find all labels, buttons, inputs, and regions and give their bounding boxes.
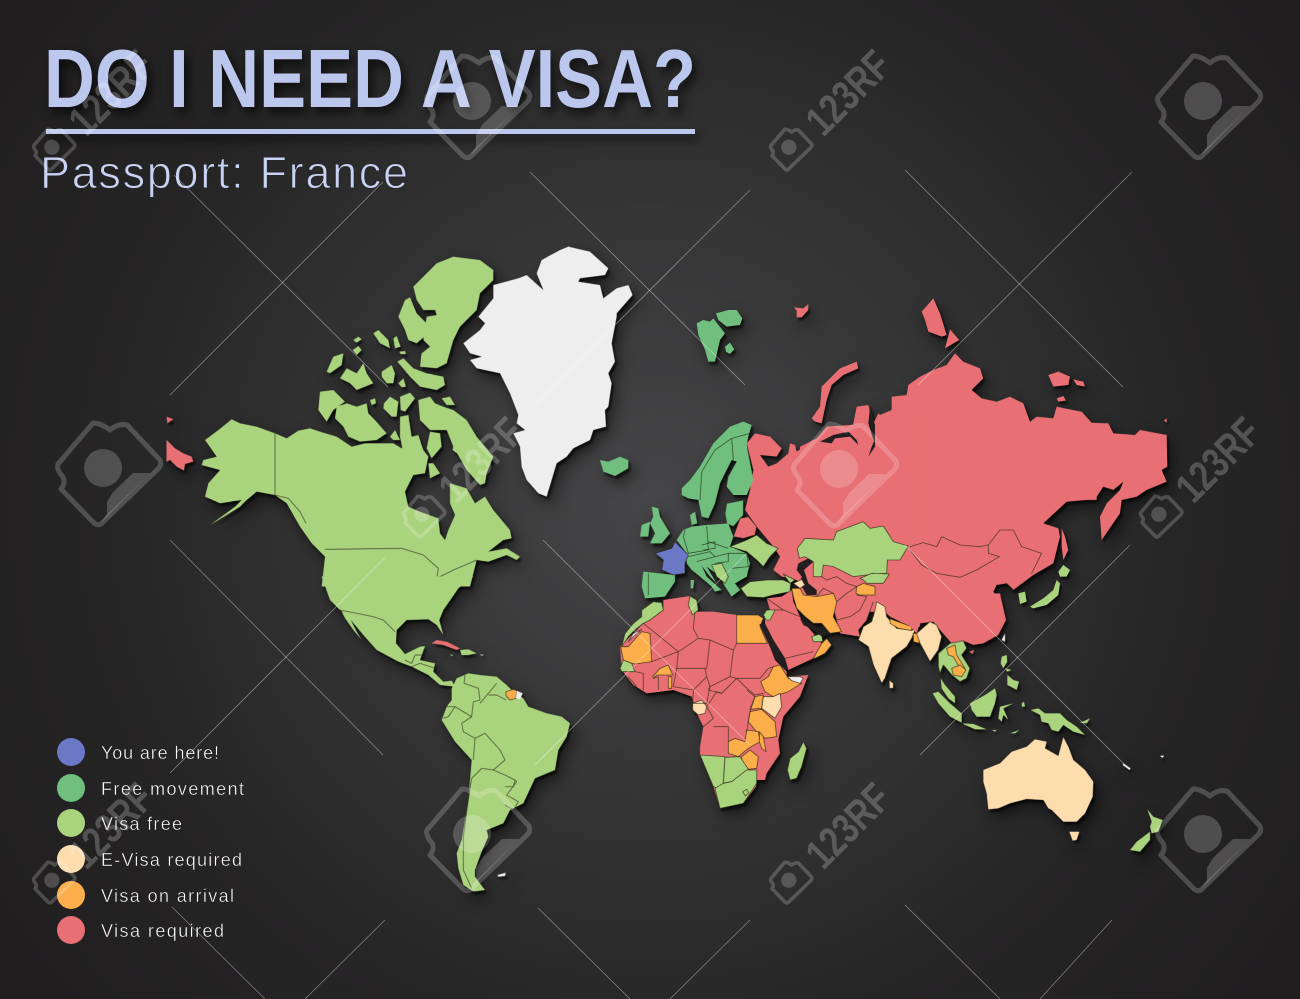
Hainan <box>969 650 974 654</box>
map: Arctic North America, Greenland and Iceland <box>167 247 633 587</box>
Arctic gulfs <box>817 407 875 457</box>
Svalbard <box>697 310 742 362</box>
legend: You are here <box>57 738 219 766</box>
logo <box>34 774 163 903</box>
USA, Mexico and Central America <box>322 577 473 687</box>
United Kingdom and Ireland <box>640 507 697 543</box>
Americas borders <box>340 610 518 888</box>
legend: Visa on arrival <box>57 881 234 909</box>
Canadian Arctic islands <box>318 257 493 485</box>
Tasmania <box>1069 832 1079 841</box>
Europe borders <box>648 433 750 595</box>
Ukraine <box>730 535 778 567</box>
logo: 123RF <box>796 774 900 877</box>
Central Europe <box>677 523 750 597</box>
stamp <box>1158 56 1261 158</box>
Baja California <box>342 612 362 640</box>
stamp <box>427 56 530 158</box>
Africa and Asia internal borders <box>628 577 873 742</box>
title rule <box>46 129 695 134</box>
logo: 123RF <box>429 408 533 511</box>
stamp <box>794 424 897 526</box>
Taiwan <box>1002 633 1005 642</box>
logo: 123RF <box>59 41 163 144</box>
map: Russia details and Japan <box>812 298 1167 608</box>
Puerto Rico <box>480 654 484 656</box>
Russia west and Central Asia <box>745 420 920 637</box>
mainland Southeast Asia <box>917 622 970 682</box>
logo <box>771 41 900 170</box>
Persian Gulf and Red Sea <box>759 618 830 670</box>
Sardinia <box>691 580 694 588</box>
Indonesia, Malaysia, Philippines, New Guinea <box>933 655 1090 735</box>
legend: Free movement: Free movement <box>101 779 244 799</box>
logo <box>771 774 900 903</box>
legend: Free movement <box>57 774 244 802</box>
map: Russia east, Mongolia, China north <box>800 353 1167 612</box>
South America <box>442 673 570 892</box>
watermark stamps <box>58 56 1261 891</box>
logo: 123RF <box>59 774 163 877</box>
logo: 123RF <box>796 41 900 144</box>
Balkans <box>712 563 728 583</box>
legend: Visa on arrival: Visa on arrival <box>101 886 234 906</box>
Australia <box>983 737 1093 822</box>
China south <box>907 593 1006 645</box>
Iceland <box>600 457 628 476</box>
small Pacific islands <box>1123 755 1164 770</box>
legend: E-Visa required <box>57 845 242 873</box>
Scandinavia <box>682 422 753 518</box>
stamp <box>58 423 161 525</box>
Italy <box>687 562 722 592</box>
title <box>44 32 696 134</box>
Novaya Zemlya and Arctic islands <box>812 298 1167 560</box>
USA borders <box>275 433 477 578</box>
logo <box>34 41 163 170</box>
New Zealand <box>1130 809 1163 852</box>
stamp <box>1158 789 1261 891</box>
legend: E-Visa required: E-Visa required <box>101 850 242 870</box>
legend: Visa required <box>57 916 224 944</box>
Falkland Islands <box>497 873 506 877</box>
legend <box>57 738 244 944</box>
Belarus <box>733 517 757 538</box>
world map <box>167 247 1167 892</box>
Japan and South Korea <box>1018 565 1070 608</box>
map: Americas south <box>322 577 570 892</box>
logo <box>404 408 533 537</box>
map: Russia west, Europe, Middle East, Africa, India <box>620 420 920 808</box>
legend: Visa free <box>57 809 182 837</box>
map: Southeast Asia and Oceania <box>907 593 1164 852</box>
logo: 123RF <box>1166 408 1270 511</box>
French Guiana <box>516 691 523 699</box>
Suriname <box>506 689 517 700</box>
legend: Visa free: Visa free <box>101 814 182 834</box>
Arabia and Levant <box>765 590 822 670</box>
logo <box>1141 408 1270 537</box>
France <box>655 542 688 575</box>
Mongolia and China borders <box>910 530 1042 590</box>
Spain and Portugal <box>642 572 675 598</box>
title text: DO I NEED A VISA? <box>44 32 696 125</box>
map: Svalbard and Franz Josef Land <box>697 304 808 362</box>
legend: You are here: You are here! <box>101 743 219 763</box>
stamp <box>427 789 530 891</box>
Cuba <box>432 640 460 650</box>
visa-status countries: Africa and Asia <box>620 522 919 808</box>
subtitle: Passport: France <box>40 147 408 198</box>
Hispaniola and Jamaica <box>450 649 477 656</box>
Alaska and Canada mainland <box>202 419 520 587</box>
legend: Visa required: Visa required <box>101 921 224 941</box>
Franz Josef Land <box>794 304 808 317</box>
Africa <box>620 596 808 808</box>
Chukotka <box>167 417 193 471</box>
Greenland <box>463 247 633 497</box>
Baltics <box>725 500 743 527</box>
Caspian Sea <box>797 558 817 595</box>
watermark lines <box>170 170 1132 999</box>
